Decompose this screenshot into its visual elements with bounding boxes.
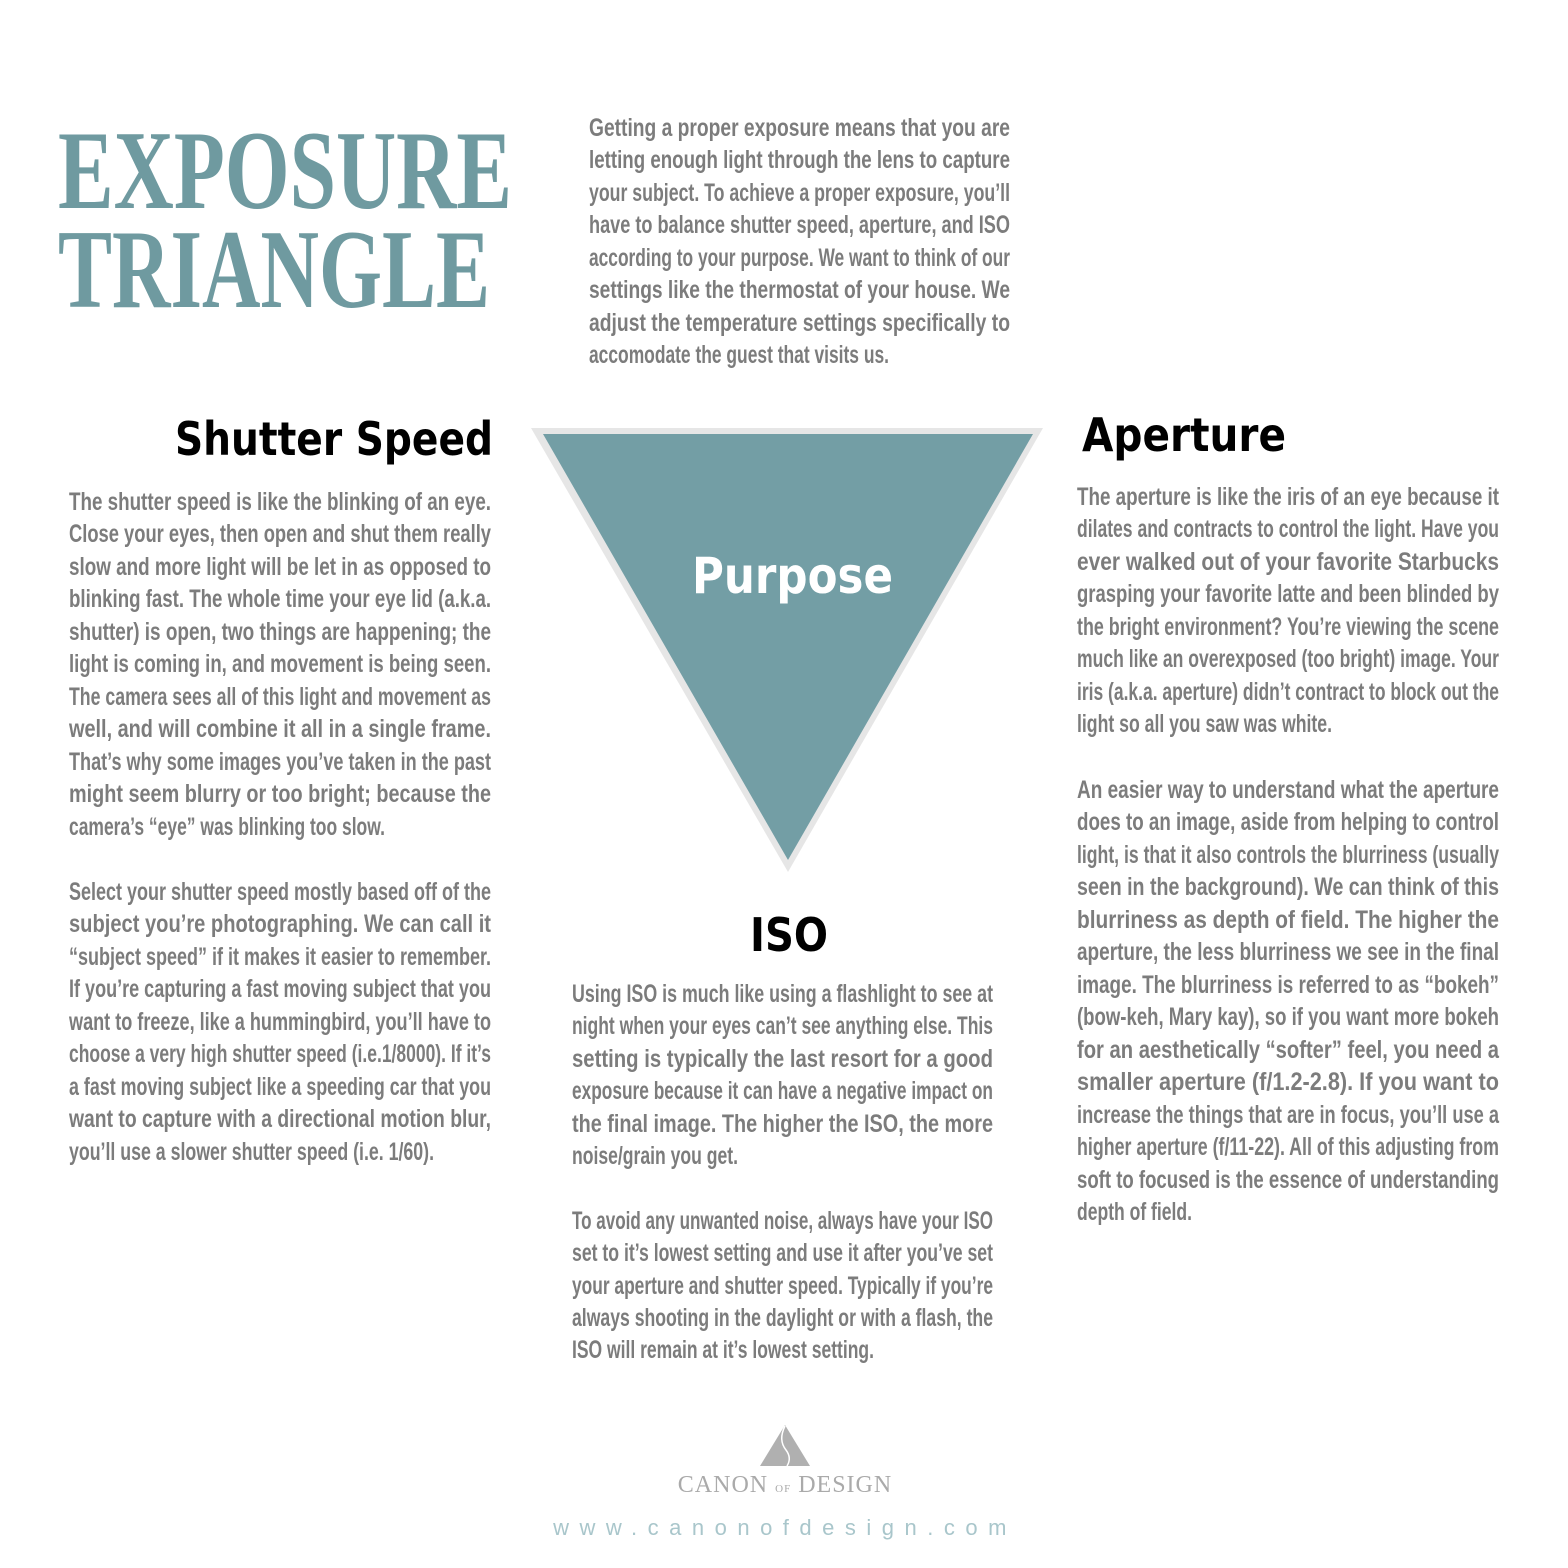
shutter speed text: “subject speed” if it makes it easier to remember. xyxy=(69,943,491,971)
aperture text: blurriness as depth of field. The higher the xyxy=(1077,906,1499,934)
intro text xyxy=(589,114,1010,369)
shutter speed text: want to capture with a directional motion blur, xyxy=(68,1105,491,1133)
shutter speed text: Close your eyes, then open and shut them really xyxy=(69,520,491,548)
label: purpose: Purpose xyxy=(692,547,893,605)
intro text: settings like the thermostat of your house. We xyxy=(589,276,1010,304)
title: TRIANGLE xyxy=(58,208,490,332)
intro text: letting enough light through the lens to capture xyxy=(589,146,1010,174)
shutter speed text: If you’re capturing a fast moving subject that you xyxy=(69,975,491,1003)
ISO text: your aperture and shutter speed. Typically if you’re xyxy=(572,1272,993,1300)
ISO text: exposure because it can have a negative impact on xyxy=(572,1077,993,1105)
shutter speed text: well, and will combine it all in a single frame. xyxy=(68,715,491,743)
shutter speed text: camera’s “eye” was blinking too slow. xyxy=(69,813,385,841)
shutter speed text: subject you’re photographing. We can call it xyxy=(69,910,492,938)
ISO text: Using ISO is much like using a flashlight to see at xyxy=(572,980,993,1008)
triangle: purpose xyxy=(531,428,1043,872)
ISO text: ISO will remain at it’s lowest setting. xyxy=(572,1336,874,1364)
ISO text: set to it’s lowest setting and use it after you’ve set xyxy=(572,1239,993,1267)
ISO text: night when your eyes can’t see anything else. This xyxy=(572,1012,993,1040)
aperture text xyxy=(1077,483,1500,1226)
ISO text: always shooting in the daylight or with a flash, the xyxy=(572,1304,993,1332)
shutter speed text: slow and more light will be let in as opposed to xyxy=(69,553,491,581)
shutter speed text: a fast moving subject like a speeding car that you xyxy=(69,1073,491,1101)
intro text: your subject. To achieve a proper exposure, you’ll xyxy=(589,179,1010,207)
shutter speed text: The shutter speed is like the blinking of an eye. xyxy=(69,488,491,516)
website url: www.canonofdesign.com xyxy=(552,1515,1017,1540)
aperture text: light so all you saw was white. xyxy=(1077,710,1332,738)
ISO text: the final image. The higher the ISO, the more xyxy=(572,1110,993,1138)
aperture text: smaller aperture (f/1.2-2.8). If you want to xyxy=(1077,1068,1499,1096)
aperture text: ever walked out of your favorite Starbucks xyxy=(1077,548,1499,576)
shutter speed text: That’s why some images you’ve taken in the past xyxy=(69,748,491,776)
ISO text: setting is typically the last resort for a good xyxy=(572,1045,993,1073)
title: EXPOSURE xyxy=(58,109,512,233)
aperture text: depth of field. xyxy=(1077,1198,1192,1226)
ISO text xyxy=(572,980,993,1364)
intro text: adjust the temperature settings specifically to xyxy=(589,309,1010,337)
shutter speed text: Select your shutter speed mostly based off of the xyxy=(69,878,491,906)
shutter speed text: want to freeze, like a hummingbird, you’ll have to xyxy=(68,1008,491,1036)
intro text: according to your purpose. We want to think of our xyxy=(589,244,1010,272)
heading: ISO: ISO xyxy=(750,908,828,962)
ISO text: noise/grain you get. xyxy=(572,1142,738,1170)
shutter speed text: shutter) is open, two things are happening; the xyxy=(69,618,491,646)
intro text: Getting a proper exposure means that you are xyxy=(589,114,1010,142)
heading: aperture: Aperture xyxy=(1082,408,1286,462)
shutter speed text: light is coming in, and movement is being seen. xyxy=(69,650,491,678)
logo xyxy=(678,1425,892,1498)
shutter speed text: blinking fast. The whole time your eye lid (a.k.a. xyxy=(69,585,491,613)
title xyxy=(58,109,512,332)
intro text: accomodate the guest that visits us. xyxy=(589,341,889,369)
shutter speed text: choose a very high shutter speed (i.e.1/8000). If it’s xyxy=(69,1040,491,1068)
shutter speed text xyxy=(68,488,492,1166)
intro text: have to balance shutter speed, aperture, and ISO xyxy=(589,211,1010,239)
logo: CANON OF DESIGN xyxy=(678,1472,892,1498)
heading: shutter speed: Shutter Speed xyxy=(175,412,493,466)
shutter speed text: might seem blurry or too bright; because the xyxy=(69,780,491,808)
shutter speed text: you’ll use a slower shutter speed (i.e. 1/60). xyxy=(69,1138,434,1166)
shutter speed text: The camera sees all of this light and movement as xyxy=(69,683,491,711)
ISO text: To avoid any unwanted noise, always have your ISO xyxy=(572,1207,993,1235)
